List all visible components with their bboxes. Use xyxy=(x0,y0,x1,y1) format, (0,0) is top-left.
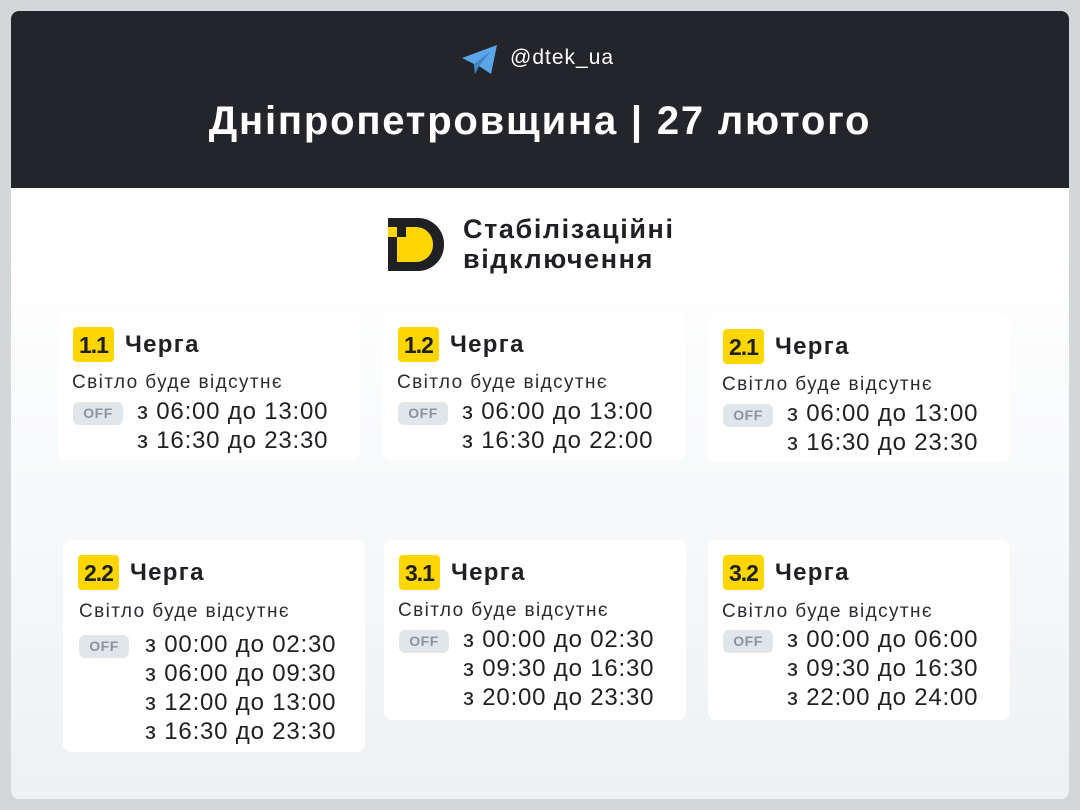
card 3.1: 3.1 xyxy=(405,560,434,586)
title: Дніпропетровщина | 27 лютого xyxy=(209,99,871,143)
card 2.2: з 06:00 до 09:30 xyxy=(145,660,336,687)
card 3.1: з 20:00 до 23:30 xyxy=(463,684,654,711)
card 2.1 xyxy=(708,314,1010,462)
card 2.2: OFF xyxy=(89,638,119,654)
card 2.2 xyxy=(63,540,365,752)
card 3.2: з 22:00 до 24:00 xyxy=(787,684,978,711)
header band xyxy=(11,11,1069,188)
logo xyxy=(388,218,444,271)
icon: telegram xyxy=(462,45,497,74)
card 1.1: Світло буде відсутнє xyxy=(72,372,283,393)
card 3.2: з 09:30 до 16:30 xyxy=(787,655,978,682)
handle: @dtek_ua xyxy=(510,46,614,69)
card 1.2: Світло буде відсутнє xyxy=(397,372,608,393)
card 3.2: Світло буде відсутнє xyxy=(722,601,933,622)
card 1.1 xyxy=(58,312,360,460)
card 2.2: Світло буде відсутнє xyxy=(79,601,290,622)
card 1.2: з 16:30 до 22:00 xyxy=(462,427,653,454)
subtitle heading: Стабілізаційні xyxy=(463,214,675,244)
card 3.2: з 00:00 до 06:00 xyxy=(787,626,978,653)
card 2.1: 2.1 xyxy=(729,334,758,360)
card 3.2 xyxy=(708,540,1010,720)
card 1.2: Черга xyxy=(450,331,525,358)
card 1.2: 1.2 xyxy=(404,332,433,358)
card 3.1: Черга xyxy=(451,559,526,586)
card 1.1: Черга xyxy=(125,331,200,358)
card 2.1: Світло буде відсутнє xyxy=(722,374,933,395)
subtitle heading xyxy=(463,214,675,274)
subtitle heading: відключення xyxy=(463,244,654,274)
card 1.1: OFF xyxy=(83,405,113,421)
card 2.2: з 12:00 до 13:00 xyxy=(145,689,336,716)
card 3.2: 3.2 xyxy=(729,560,758,586)
card 3.1: з 09:30 до 16:30 xyxy=(463,655,654,682)
card 3.2: OFF xyxy=(733,633,763,649)
card 1.1: з 06:00 до 13:00 xyxy=(137,398,328,425)
card 3.1 xyxy=(384,540,686,720)
card 1.2: OFF xyxy=(408,405,438,421)
card 2.1: з 16:30 до 23:30 xyxy=(787,429,978,456)
card 2.2: 2.2 xyxy=(84,560,113,586)
card 1.2 xyxy=(383,312,685,460)
card 2.1: Черга xyxy=(775,333,850,360)
card 1.1: 1.1 xyxy=(79,332,108,358)
card 3.1: OFF xyxy=(409,633,439,649)
card 2.2: з 00:00 до 02:30 xyxy=(145,631,336,658)
card 3.2: Черга xyxy=(775,559,850,586)
card 3.1: Світло буде відсутнє xyxy=(398,600,609,621)
card 2.1: з 06:00 до 13:00 xyxy=(787,400,978,427)
card 2.1: OFF xyxy=(733,407,763,423)
card 2.2: з 16:30 до 23:30 xyxy=(145,718,336,745)
card 1.2: з 06:00 до 13:00 xyxy=(462,398,653,425)
card 2.2: Черга xyxy=(130,559,205,586)
card 3.1: з 00:00 до 02:30 xyxy=(463,626,654,653)
card 1.1: з 16:30 до 23:30 xyxy=(137,427,328,454)
